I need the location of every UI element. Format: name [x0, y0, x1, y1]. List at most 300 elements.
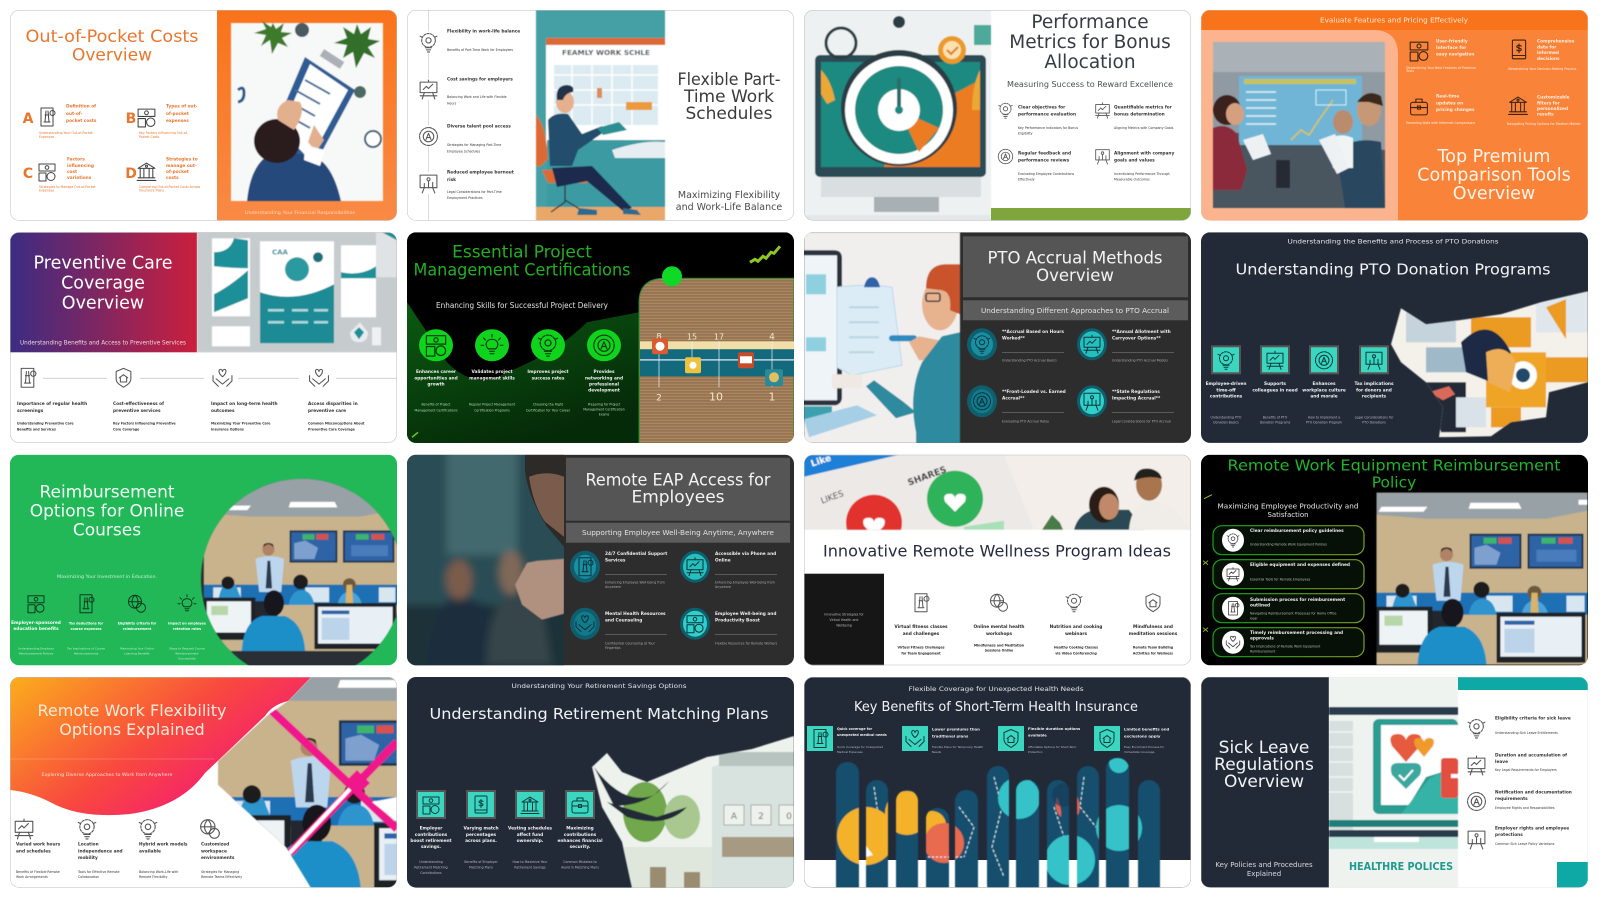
- collage bird silhouette: [1386, 287, 1591, 442]
- four regulation items: Key Legal Requirements for Employers: [1495, 768, 1557, 772]
- four feature items: pricing changes: [1436, 106, 1475, 112]
- four accrual items: Understanding PTO Accrual Basics: [1002, 358, 1057, 362]
- card: Sick Leave Regulations Overview: [1201, 677, 1588, 888]
- illustration: man with clipboard at monitor: [804, 232, 960, 443]
- four step columns: Donation Programs: [1260, 421, 1291, 425]
- items A to D: manage out-: [166, 162, 197, 168]
- four step columns: Supports: [1264, 382, 1286, 387]
- four circles with labels: success rates: [532, 375, 565, 381]
- photo: social reactions and couple: SHARES: [907, 465, 948, 489]
- items list: Legal Considerations for Part-Time: [447, 190, 502, 194]
- option columns: Benefits of Flexible Remote: [16, 870, 60, 874]
- four columns: Care Coverage: [113, 427, 139, 431]
- items A to D: influencing: [67, 162, 94, 168]
- four items: Regular feedback and: [1018, 152, 1071, 156]
- four circles with labels: Management Certification: [583, 407, 625, 411]
- option columns: and schedules: [16, 848, 51, 854]
- four feature items: Streamlining Your Best Features of Premium: [1406, 66, 1476, 70]
- four program columns: Online mental health: [974, 625, 1024, 630]
- four circles with labels: management skills: [469, 375, 515, 381]
- teal corner block: [1557, 862, 1588, 888]
- four benefit items: available: [1028, 733, 1047, 737]
- four policy boxes: [1213, 526, 1364, 657]
- four step columns: Benefits of Employer: [464, 860, 498, 864]
- title: Comparison Tools: [1417, 166, 1571, 186]
- title: Coverage: [61, 273, 145, 293]
- four benefit items: Flexible Plans for Temporary Health: [932, 745, 983, 749]
- four accrual items: Evaluating PTO Accrual Rates: [1002, 419, 1049, 423]
- four program columns: Nutrition and cooking: [1050, 625, 1102, 630]
- option columns: [15, 819, 242, 879]
- four policy boxes: outlined: [1250, 602, 1270, 608]
- option columns: independence and: [78, 848, 123, 854]
- four items: Alignment with company: [1114, 152, 1174, 156]
- subtitle: Understanding Different Approaches to PTO Accrual: [981, 307, 1169, 315]
- timeline image panel: 2: [656, 393, 662, 403]
- four benefit items: Immediate Coverage: [1124, 750, 1155, 754]
- four support items: Anywhere: [605, 585, 621, 589]
- items A to D: B: [126, 111, 136, 127]
- benefit columns: Successfully: [178, 657, 196, 661]
- title: Options for Online: [30, 502, 184, 522]
- title: Remote EAP Access for: [586, 471, 771, 491]
- four items: Clear objectives for: [1018, 106, 1065, 110]
- benefit columns: Maximizing Your Online: [120, 647, 154, 651]
- four step columns: Retirement Matching: [414, 865, 448, 869]
- four circles with labels: [414, 329, 625, 416]
- four items: [998, 103, 1174, 182]
- benefit columns: Reimbursement: [176, 652, 199, 656]
- four circles with labels: Improves project: [527, 370, 569, 375]
- four step columns: Varying match: [463, 826, 499, 832]
- four program columns: Mindfulness and Meditation: [974, 644, 1024, 648]
- four step columns: Donation Basics: [1213, 421, 1239, 425]
- benefit columns: education benefits: [13, 626, 59, 632]
- four step columns: Matching Plans: [469, 865, 493, 869]
- gradient title panel: [10, 232, 197, 352]
- four accrual items: **Annual Allotment with: [1112, 330, 1171, 335]
- four program columns: webinars: [1065, 631, 1087, 637]
- title: Performance: [1031, 12, 1149, 33]
- four step columns: Vesting schedules: [508, 826, 552, 832]
- peach panel: [1201, 30, 1398, 221]
- four accrual items: **State Regulations: [1112, 390, 1160, 395]
- four feature items: Revealing Data with Informed Comparisons: [1406, 121, 1476, 125]
- four feature items: interface for: [1436, 45, 1467, 51]
- blurred photo: pointing man: [397, 445, 577, 675]
- pill-shaped illustration bars: [824, 752, 1174, 892]
- title: Essential Project: [452, 242, 592, 262]
- four step columns: affect fund: [517, 832, 543, 838]
- four support items: Accessible via Phone and: [715, 552, 776, 557]
- items A to D: Expenses: [39, 188, 55, 192]
- four step columns: across plans.: [465, 838, 497, 844]
- card: Remote Work Equipment Reimbursement Policy: [1201, 455, 1588, 666]
- four policy boxes: Gear: [1250, 617, 1258, 621]
- subtitle: Understanding Benefits and Access to Preventive Services: [20, 340, 186, 346]
- four circles with labels: Preparing for Project: [588, 402, 620, 406]
- four feature items: User-friendly: [1436, 40, 1468, 44]
- green footer bar: [991, 208, 1191, 221]
- items A to D: Comparing Out-of-Pocket Costs Across: [139, 185, 200, 189]
- subtitle: and Work-Life Balance: [676, 202, 782, 213]
- four circles with labels: development: [588, 387, 620, 393]
- subtitle: Explained: [1247, 870, 1281, 878]
- four benefit items: traditional plans: [932, 733, 969, 738]
- four benefit items: Medical Expenses: [837, 750, 863, 754]
- four policy boxes: approvals: [1250, 635, 1274, 641]
- four accrual items: Worked**: [1002, 335, 1026, 341]
- timeline image panel: 1: [768, 390, 776, 403]
- four circles with labels: professional: [589, 381, 619, 387]
- four columns: Common Misconceptions About: [308, 421, 364, 425]
- subtitle: Maximizing Your Investment in Education.: [57, 574, 157, 580]
- four step columns: Understanding PTO: [1211, 415, 1241, 419]
- four step columns: ownership.: [517, 838, 544, 844]
- jar photo silhouette: [587, 732, 799, 892]
- illustration: stopwatch on monitor: [804, 10, 991, 221]
- benefit columns: course expenses: [70, 627, 102, 631]
- four step columns: savings.: [421, 844, 441, 850]
- four circles with labels: Provides: [593, 370, 615, 375]
- four circles with labels: Validates project: [471, 370, 513, 375]
- subtitle line 2: Satisfaction: [1267, 511, 1309, 519]
- four items: Incentivizing Performance Through: [1114, 172, 1170, 176]
- timeline image panel: 15: [687, 332, 697, 341]
- four policy boxes: Clear reimbursement policy guidelines: [1250, 528, 1344, 534]
- illustration: brochure set: [197, 232, 397, 352]
- items list: Benefits of Part-Time Work for Employees: [447, 48, 513, 52]
- four columns: Cost-effectiveness of: [113, 402, 164, 407]
- four policy boxes: Essential Tools for Remote Employees: [1250, 578, 1311, 582]
- four step columns: [1206, 346, 1394, 425]
- benefit columns: Employer-sponsored: [11, 621, 61, 626]
- four benefit items: Affordable Options for Short-Term: [1028, 745, 1076, 749]
- four circles with labels: Exams: [599, 412, 610, 416]
- four accrual items: Carryover Options**: [1112, 335, 1161, 341]
- four program columns: for Team Engagement: [901, 652, 941, 656]
- four feature items: results: [1537, 111, 1554, 117]
- option columns: Location: [78, 842, 99, 848]
- four feature items: [1405, 38, 1581, 126]
- four benefit items: unexpected medical needs: [837, 733, 887, 737]
- subtitle: Enhancing Skills for Successful Project Delivery: [436, 301, 609, 310]
- illustration: brochure set: CAA: [272, 248, 289, 256]
- four step columns: security.: [570, 844, 591, 850]
- four step columns: Employer: [420, 826, 442, 832]
- items A to D: [23, 104, 201, 192]
- subtitle: Measuring Success to Reward Excellence: [1007, 80, 1173, 89]
- title: PTO Accrual Methods: [987, 248, 1163, 267]
- four regulation items: Common Sick Leave Policy Variations: [1495, 842, 1555, 846]
- four circles with labels: Benefits of Project: [421, 402, 451, 406]
- teal top band: [1458, 677, 1588, 690]
- squiggle accent: [750, 246, 780, 262]
- card: Preventive Care Coverage Overview: [10, 232, 397, 443]
- four circles with labels: Certification for Your Career: [526, 408, 571, 412]
- four columns: Impact on long-term health: [211, 402, 278, 407]
- four support items: Services: [605, 557, 626, 563]
- four regulation items: protections: [1495, 832, 1523, 838]
- four program columns: Healthy Cooking Classes: [1054, 646, 1098, 650]
- four benefit items: [807, 726, 1169, 754]
- jar photo silhouette: 2: [758, 812, 764, 822]
- benefit columns: Eligibility criteria for: [118, 622, 156, 626]
- card: Essential Project Management Certifications: [407, 232, 794, 443]
- four step columns: [410, 791, 603, 875]
- four program columns: and challenges: [903, 631, 940, 637]
- four columns: Maximizing Your Preventive Care: [211, 421, 270, 425]
- four feature items: filters for: [1537, 100, 1561, 106]
- poster caption: HEALTHRE POLICES: [1349, 860, 1453, 873]
- four step columns: Contributions: [420, 871, 442, 875]
- option columns: Remote Flexibility: [139, 875, 168, 879]
- orange side panel: [217, 10, 397, 221]
- title line 2: Time Work: [684, 87, 774, 107]
- items A to D: of-pocket: [166, 168, 189, 174]
- title line 2: Policy: [1372, 474, 1416, 492]
- four step columns: Enhances: [1312, 382, 1336, 387]
- items list: Cost savings for employers: [447, 76, 513, 82]
- four step columns: workplace culture: [1302, 387, 1346, 393]
- option columns: Hybrid work models: [139, 842, 187, 848]
- four accrual items: **Front-Loaded vs. Earned: [1002, 390, 1066, 395]
- black side box: Innovative Strategies for: [824, 613, 864, 617]
- items list: Employee Schedules: [447, 150, 480, 154]
- four items: performance evaluation: [1018, 111, 1076, 117]
- four step columns: PTO Donation Program: [1306, 421, 1342, 425]
- title: Overview: [1224, 772, 1304, 792]
- four columns: outcomes: [211, 407, 235, 413]
- four program columns: [894, 594, 1178, 656]
- header text: Evaluate Features and Pricing Effectively: [1320, 16, 1468, 24]
- four benefit items: Needs: [932, 750, 942, 754]
- four regulation items: Duration and accumulation of: [1495, 754, 1567, 758]
- timeline image panel: [639, 278, 794, 443]
- four columns: Importance of regular health: [17, 402, 87, 407]
- card: Performance Metrics for Bonus Allocation: [804, 10, 1191, 221]
- title: Reimbursement: [39, 483, 175, 503]
- items A to D: Key Factors Influencing Out-of-: [139, 131, 188, 135]
- four support items: Flexible Resources for Remote Workers: [715, 642, 778, 646]
- four support items: Productivity Boost: [715, 617, 760, 623]
- four feature items: informed: [1537, 50, 1559, 56]
- items A to D: Pocket Costs: [139, 135, 160, 139]
- photo: social reactions and couple: LIKES: [820, 489, 845, 507]
- benefit columns: Reimbursements: [74, 652, 99, 656]
- items A to D: pocket costs: [66, 118, 97, 124]
- four feature items: easy navigation: [1436, 51, 1474, 57]
- four feature items: decisions: [1537, 55, 1560, 61]
- four circles with labels: Enhances career: [416, 370, 456, 375]
- timeline image panel: 8: [656, 332, 662, 342]
- benefit columns: reimbursement: [123, 627, 152, 631]
- four benefit items: Easy Enrollment Process for: [1124, 745, 1164, 749]
- four feature items: Customizable: [1537, 96, 1570, 100]
- title: Top Premium: [1438, 147, 1550, 167]
- four circles with labels: networking and: [585, 375, 623, 381]
- four accrual items: [967, 328, 1174, 423]
- four policy boxes: Understanding Remote Work Equipment Policies: [1250, 543, 1327, 547]
- four feature items: data for: [1537, 44, 1557, 50]
- option columns: Balancing Work-Life with: [139, 870, 178, 874]
- card: Flexible Part-Time Work Schedules: [407, 10, 794, 221]
- title: Metrics for Bonus: [1009, 32, 1171, 53]
- four step columns: Benefits of PTO: [1263, 415, 1287, 419]
- timeline image panel: 17: [714, 332, 724, 341]
- option columns: Work Arrangements: [16, 875, 48, 879]
- four circles with labels: Choosing the Right: [533, 402, 563, 406]
- four step columns: contributions: [415, 832, 448, 838]
- subtitle: Maximizing Flexibility: [678, 190, 780, 201]
- items A to D: of-pocket: [166, 110, 189, 116]
- title: Overview: [62, 293, 144, 313]
- title line 2: Employees: [631, 488, 725, 508]
- card: Top Premium Comparison Tools Overview: [1201, 10, 1588, 221]
- four regulation items: leave: [1495, 758, 1508, 764]
- four program columns: Mindfulness and: [1133, 625, 1173, 630]
- benefit columns: retention rates: [173, 627, 201, 631]
- navy left panel: [1201, 677, 1329, 888]
- four support items: and Counseling: [605, 617, 642, 623]
- four benefit items: Flexible duration options: [1028, 727, 1080, 731]
- four columns: Preventive Care Coverage: [308, 427, 355, 431]
- footer caption: Understanding Your Financial Responsibilities: [245, 210, 356, 216]
- four columns: Access disparities in: [308, 402, 358, 407]
- four step columns: percentages: [466, 832, 497, 838]
- four items: bonus determination: [1114, 111, 1165, 117]
- title: Understanding PTO Donation Programs: [1236, 260, 1551, 278]
- four benefit items: Quick Coverage for Unexpected: [837, 745, 883, 749]
- illustration: laptop with hearts: [1329, 677, 1458, 888]
- items list: Diverse talent pool access: [447, 124, 511, 130]
- four benefit items: Limited benefits and: [1124, 726, 1169, 732]
- four columns: preventive care: [308, 407, 346, 413]
- option columns: Customized: [201, 842, 229, 848]
- card: Remote Work Flexibility Options Explained: [10, 667, 492, 891]
- four support items: Anywhere: [715, 585, 731, 589]
- jar photo silhouette: 0: [786, 812, 792, 822]
- four step columns: for donors and: [1356, 387, 1392, 393]
- four accrual items: **Accrual Based on Hours: [1002, 330, 1064, 335]
- option columns: Remote Teams Effectively: [201, 875, 242, 879]
- four step columns: PTO Donations: [1362, 421, 1386, 425]
- four step columns: enhances financial: [557, 838, 603, 844]
- four items: Aligning Metrics with Company Goals: [1114, 126, 1174, 130]
- four step columns: contributions: [564, 832, 597, 838]
- gradient blob: [10, 677, 311, 815]
- four circles with labels: Certification Programs: [474, 408, 510, 412]
- option columns: Tools for Effective Remote: [78, 870, 119, 874]
- four support items: Confidential Counseling at Your: [605, 642, 655, 646]
- illustration: man at calendar: [536, 10, 665, 221]
- items A to D: Expenses: [39, 135, 55, 139]
- items A to D: Strategies to Manage Out-of-Pocket: [39, 185, 96, 189]
- four program columns: meditation sessions: [1129, 631, 1178, 637]
- subtitle: Key Policies and Procedures: [1215, 861, 1313, 869]
- four support items: [570, 551, 778, 650]
- photo: clipboard from above: [231, 21, 383, 201]
- four step columns: colleagues in need: [1252, 387, 1298, 393]
- four support items: Employee Well-being and: [715, 612, 776, 617]
- items list: [417, 28, 520, 200]
- four feature items: Tools: [1405, 69, 1414, 73]
- four circles with labels: growth: [427, 381, 445, 387]
- four items: Measurable Outcomes: [1114, 178, 1150, 182]
- title: Regulations: [1214, 755, 1314, 775]
- benefit columns: Learning Benefits: [124, 652, 150, 656]
- items list: risk: [447, 176, 456, 182]
- four policy boxes: Tax Implications of Remote Work Equipment: [1250, 645, 1320, 649]
- four columns: Insurance Options: [211, 427, 244, 431]
- four program columns: via Video Conferencing: [1055, 652, 1097, 656]
- four regulation items: Understanding Sick Leave Entitlements: [1495, 731, 1558, 735]
- title: Courses: [73, 521, 141, 541]
- four step columns: and morale: [1310, 393, 1338, 399]
- four step columns: boost retirement: [410, 838, 452, 844]
- four step columns: Employee-driven: [1206, 382, 1246, 387]
- four circles with labels: opportunities and: [414, 375, 458, 381]
- title: Sick Leave: [1219, 738, 1309, 758]
- header text: Understanding the Benefits and Process of PTO Donations: [1288, 239, 1498, 245]
- items A to D: Definition of: [66, 104, 96, 110]
- classroom photo: [1376, 493, 1588, 665]
- green dot: [662, 266, 682, 286]
- four program columns: Sessions Online: [985, 649, 1013, 653]
- four accrual items: Legal Considerations for PTO Accrual: [1112, 419, 1171, 423]
- four step columns: Tax implications: [1354, 382, 1394, 387]
- title: Remote Work Flexibility: [38, 701, 226, 720]
- title: Understanding Retirement Matching Plans: [430, 705, 768, 723]
- timeline image panel: 10: [709, 390, 723, 403]
- items list: Hours: [447, 102, 457, 106]
- items A to D: Understanding Your Out-of-Pocket: [39, 131, 93, 135]
- four regulation items: requirements: [1495, 796, 1528, 802]
- four regulation items: Employee Rights and Responsibilities: [1495, 806, 1555, 810]
- items list: Reduced employee burnout: [447, 170, 514, 176]
- jar photo silhouette: A: [731, 812, 738, 822]
- card: Reimbursement Options for Online Courses: [10, 455, 400, 670]
- classroom photo cut-outs: [218, 667, 492, 891]
- four benefit items: Quick coverage for: [837, 727, 872, 731]
- items A to D: costs: [166, 174, 179, 180]
- four support items: Enhancing Employee Well-being from: [715, 581, 775, 585]
- card: Innovative Remote Wellness Program Ideas: [804, 454, 1191, 666]
- four program columns: Remote Team Building: [1133, 646, 1173, 650]
- four items: Key Performance Indicators for Bonus: [1018, 126, 1078, 130]
- four columns: preventive services: [113, 407, 161, 413]
- title panel: [566, 458, 790, 521]
- four support items: Fingertips: [605, 646, 621, 650]
- items A to D: expenses: [166, 118, 189, 124]
- items list: Flexibility in work-life balance: [447, 28, 520, 34]
- title panel: [963, 236, 1188, 297]
- four feature items: updates on: [1436, 100, 1463, 106]
- four regulation items: Employer rights and employee: [1495, 826, 1569, 832]
- four columns: Understanding Preventive Care: [17, 421, 74, 425]
- subtitle: Exploring Diverse Approaches to Work from Anywhere: [42, 772, 173, 778]
- items list: Employment Practices: [447, 196, 483, 200]
- card: Remote EAP Access for Employees: [397, 445, 794, 675]
- four step columns: contributions: [1210, 393, 1243, 399]
- classroom photo oval: [200, 475, 400, 670]
- photo: social reactions and couple: Like: [810, 454, 833, 470]
- title line 2: Schedules: [686, 104, 773, 124]
- title: Out-of-Pocket Costs: [26, 27, 199, 47]
- four items: goals and values: [1114, 157, 1155, 163]
- option columns: environments: [201, 854, 235, 860]
- four columns: [17, 368, 365, 431]
